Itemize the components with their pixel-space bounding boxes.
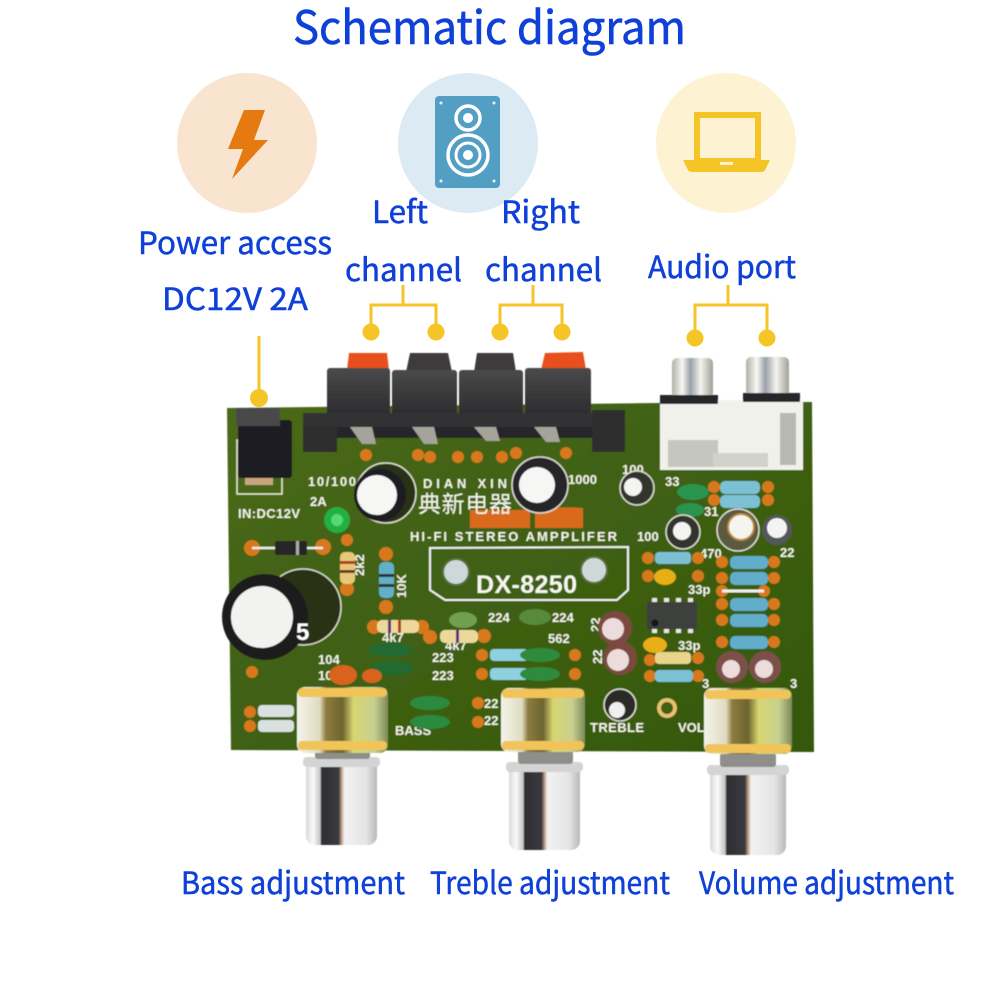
pcb silk text: 33 [665,474,679,489]
DC power jack [236,408,292,494]
label: power access: Power access [138,218,332,263]
pcb base [227,402,814,752]
treble knob [501,688,585,850]
pcb silk text: 223 [432,668,454,683]
pcb silk text: BASS [395,723,431,738]
label: bass adjustment: Bass adjustment [181,858,405,903]
resistors [258,481,768,732]
label: DC12V 2A: DC12V 2A [162,274,308,319]
electrolytic capacitors: 5 [296,619,309,646]
terminal block [303,352,625,452]
pcb silk text: 224 [552,610,574,625]
IC chip [647,598,697,633]
pcb silk text [238,462,797,738]
pcb silk text: 10K [394,574,409,598]
pcb silk text: 2k2 [352,554,367,576]
pcb silk text: 22 [590,650,605,664]
orange silk blobs [470,507,583,528]
mounting hole [657,698,677,718]
pcb silk text: 典新电器 [418,485,512,519]
icon: power bolt [177,73,317,213]
icon: laptop [656,73,796,213]
pcb silk text: 31 [704,504,718,519]
label: treble adjustment: Treble adjustment [430,858,670,903]
label: left channel: channel [345,245,462,290]
pcb silk text: 562 [548,631,570,646]
label: left channel: Left [372,187,428,232]
pcb silk text: HI-FI STEREO AMPPLIFER [410,529,618,544]
pcb silk text: 2A [310,494,327,509]
LED [324,507,350,533]
label: right channel: Right [501,187,580,232]
connector: audio port [686,285,776,346]
pcb silk text: 33p [678,638,700,653]
pcb silk text: 10/100 [308,474,356,489]
connector: left channel [362,285,444,340]
amplifier circuit board [222,352,814,855]
connector: right channel [492,285,570,340]
volume knob [704,688,792,855]
electrolytic capacitors [222,457,792,721]
pcb silk text: DIAN XIN [423,476,507,491]
solder pads [244,447,780,732]
pcb silk text: 100 [622,462,644,477]
connector: power [250,336,268,407]
pcb silk text: 3 [702,676,709,691]
label: audio port: Audio port [648,242,796,287]
label: left channel [345,187,462,290]
pcb silk text: 224 [488,610,510,625]
pcb silk text: 22 [484,696,498,711]
film capacitors [329,484,709,729]
pcb silk text: 22 [588,618,603,632]
pcb silk text: 104 [318,652,340,667]
label: right channel [485,187,602,290]
pcb silk text: 3 [790,676,797,691]
pcb silk text: 22 [484,713,498,728]
label: volume adjustment: Volume adjustment [699,858,954,903]
pcb silk text: TREBLE [590,720,644,735]
model plate DX-8250: DX-8250 [476,571,577,599]
pcb silk text: 223 [432,650,454,665]
pcb silk text: 4k7 [445,638,467,653]
pcb silk text: 470 [700,546,722,561]
pcb silk text: IN:DC12V [238,506,300,521]
icon: speaker [398,73,538,213]
pcb silk text: 4k7 [382,630,404,645]
pcb silk text: VOL [678,720,705,735]
bass knob [297,687,388,845]
label: right channel: channel [485,245,602,290]
pcb silk text: 100 [637,529,659,544]
pcb silk text: 1000 [568,472,597,487]
RCA jacks [660,357,803,470]
model plate DX-8250 [430,547,628,600]
pcb silk text: 33p [688,582,710,597]
pcb silk text: 22 [780,545,794,560]
diode [252,541,323,555]
pcb silk text: 104 [318,668,340,683]
